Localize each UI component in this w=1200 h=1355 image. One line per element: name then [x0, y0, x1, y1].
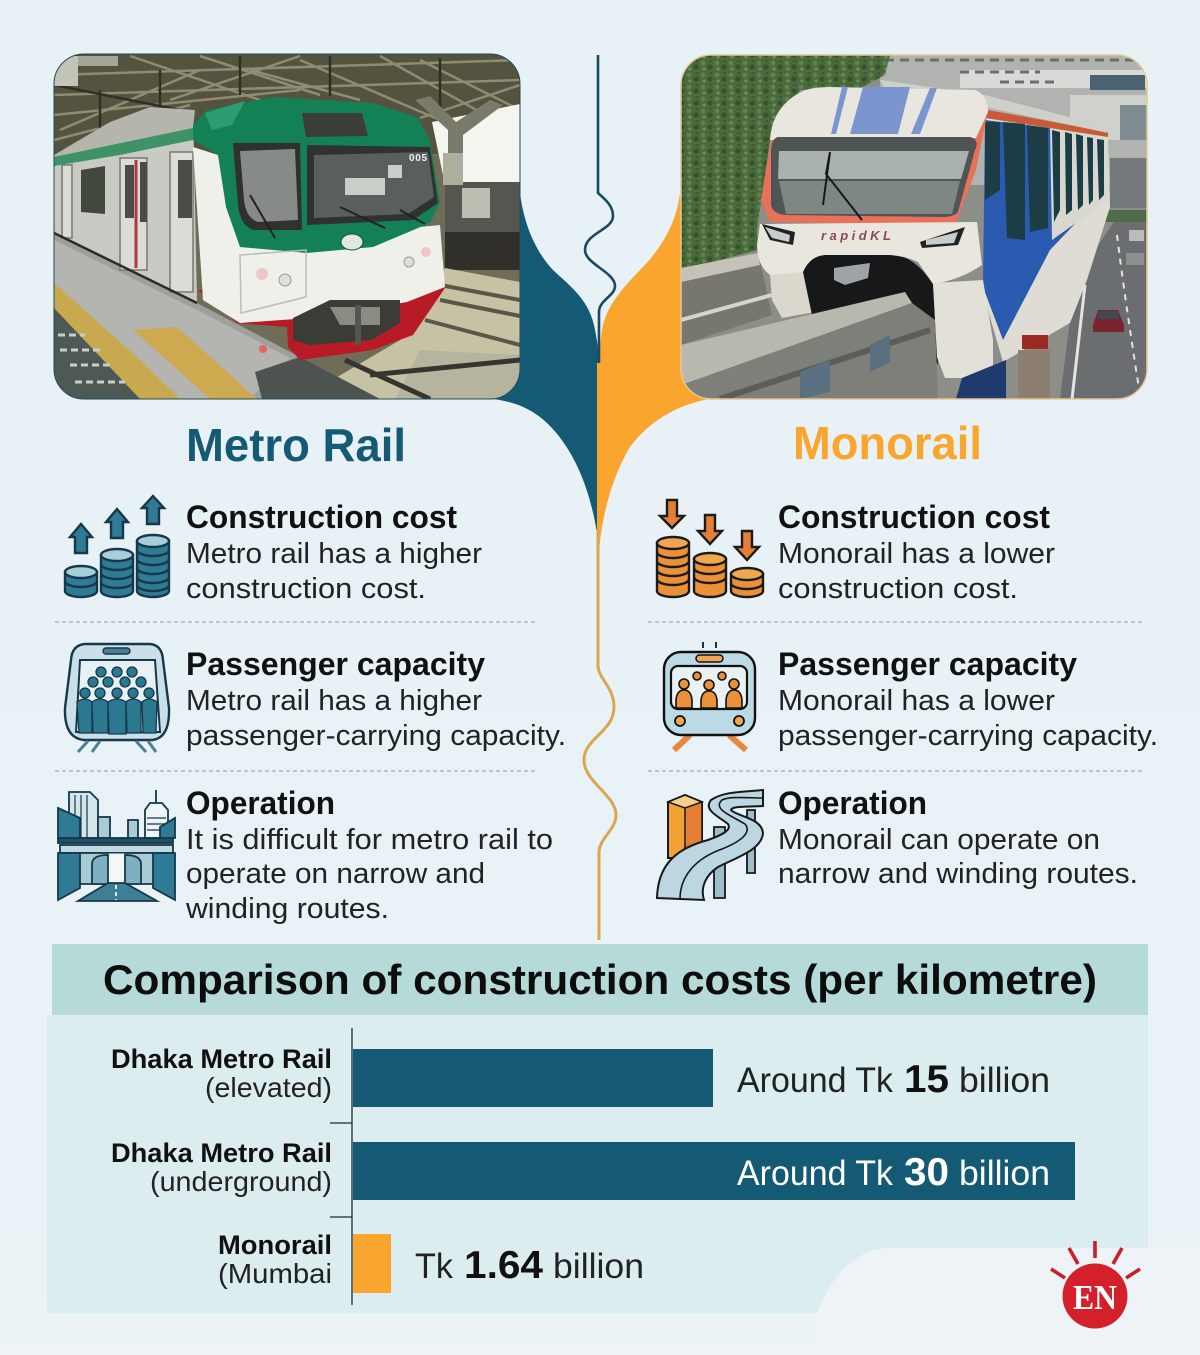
photo: monorail train: rapidKL [821, 228, 891, 243]
text: metro operation: Operation [186, 785, 335, 821]
text: metro construction cost: construction cost. [186, 573, 426, 605]
photo: metro rail train at station [54, 54, 520, 399]
row: Monorail Mumbai: Monorail [218, 1230, 332, 1260]
row: Monorail Mumbai: billion [553, 1247, 644, 1286]
text: metro passenger capacity: passenger-carrying capacity. [186, 720, 566, 752]
row: Dhaka Metro Rail elevated: Around Tk [737, 1061, 893, 1100]
coupler [293, 300, 400, 345]
train side [54, 110, 197, 303]
trees [681, 55, 890, 270]
text: monorail construction cost: construction cost. [778, 573, 1018, 605]
row: Dhaka Metro Rail elevated: billion [959, 1061, 1050, 1100]
icon: small monorail train [664, 642, 755, 750]
icon: coins rising (metro) [65, 496, 169, 597]
central orange swoosh [597, 193, 715, 550]
windscreen [771, 137, 977, 217]
text: monorail passenger capacity [778, 646, 1158, 752]
road [1060, 220, 1147, 399]
heading: Monorail: Monorail [793, 417, 982, 469]
logo: EN sun: EN [1073, 1278, 1117, 1317]
text: metro passenger capacity: Passenger capacity [186, 646, 485, 682]
icon: winding elevated road [657, 790, 763, 900]
logo: EN sun [1051, 1241, 1140, 1328]
row: Dhaka Metro Rail underground [111, 1138, 1075, 1200]
panel: cost comparison chart [47, 944, 1200, 1355]
text: monorail operation: Operation [778, 785, 927, 821]
central teal wavy line [585, 55, 615, 363]
row: Dhaka Metro Rail elevated: Dhaka Metro Rail [111, 1044, 332, 1074]
buildings [880, 55, 1147, 185]
text: monorail construction cost: Monorail has a lower [778, 538, 1055, 570]
row: Monorail Mumbai: 1.64 [464, 1244, 543, 1287]
text: monorail operation [778, 785, 1138, 890]
row: Dhaka Metro Rail underground: (underground) [150, 1166, 332, 1197]
train green cap [193, 97, 440, 253]
head sign [302, 113, 368, 137]
text: monorail passenger capacity: Passenger capacity [778, 646, 1077, 682]
row: Dhaka Metro Rail underground: billion [959, 1154, 1050, 1193]
photo: metro rail train at station: 005 [409, 153, 427, 164]
text: metro operation [185, 785, 553, 925]
train red skirt [198, 288, 445, 360]
text: monorail passenger capacity: passenger-carrying capacity. [778, 720, 1158, 752]
text: metro passenger capacity [186, 646, 566, 752]
row: Monorail Mumbai: Tk [415, 1247, 453, 1286]
chart heading band: Comparison of construction costs (per kilometre) [103, 956, 1097, 1003]
row: Dhaka Metro Rail underground: 30 [904, 1151, 949, 1194]
main guideway [681, 303, 938, 399]
text: metro construction cost: Metro rail has a higher [186, 538, 482, 570]
text: metro construction cost: Construction cost [186, 499, 457, 535]
text: metro operation: winding routes. [185, 893, 389, 925]
text: metro operation: operate on narrow and [186, 858, 485, 890]
text: monorail construction cost [778, 499, 1055, 605]
blue advertising board [956, 360, 1006, 399]
icon: crowded metro train [65, 644, 169, 752]
concrete pier [1018, 350, 1050, 399]
train white front [193, 147, 445, 323]
icon: coins falling (monorail) [657, 500, 763, 597]
tracks [338, 268, 520, 398]
right leg [933, 280, 993, 378]
windows [233, 143, 302, 230]
chart heading band [52, 944, 1148, 1015]
text: metro operation: It is difficult for metro rail to [186, 824, 553, 856]
text: monorail construction cost: Construction cost [778, 499, 1050, 535]
body top with stripes [770, 87, 988, 140]
photo: monorail train [681, 55, 1147, 399]
background guideway [681, 253, 772, 345]
central teal swoosh [480, 193, 599, 533]
central orange wavy line [584, 530, 616, 940]
roof trusses [54, 54, 520, 154]
row: Dhaka Metro Rail underground: Dhaka Metro Rail [111, 1138, 332, 1168]
row: Dhaka Metro Rail underground: Around Tk [737, 1154, 893, 1193]
orange windscreen surround [761, 115, 987, 225]
text: monorail passenger capacity: Monorail has a lower [778, 685, 1055, 717]
sky and background structure [432, 104, 520, 185]
icon: city with flyover [58, 790, 175, 901]
platform [54, 233, 380, 399]
monorail side [985, 110, 1110, 362]
heading: Metro Rail: Metro Rail [186, 419, 406, 471]
row: Dhaka Metro Rail elevated [111, 1044, 1050, 1107]
opening [803, 255, 938, 365]
photo borders [54, 54, 1147, 399]
row: Dhaka Metro Rail elevated: (elevated) [205, 1072, 332, 1103]
text: metro passenger capacity: Metro rail has a higher [186, 685, 482, 717]
text: metro construction cost [186, 499, 482, 605]
face [757, 222, 982, 284]
row: Monorail Mumbai: (Mumbai [218, 1258, 332, 1289]
row: Dhaka Metro Rail elevated: 15 [904, 1058, 949, 1101]
row: Monorail Mumbai [218, 1230, 644, 1293]
train logo and panels [341, 234, 363, 250]
text: monorail operation: Monorail can operate on [778, 824, 1100, 856]
text: monorail operation: narrow and winding routes. [778, 858, 1138, 890]
left leg [770, 270, 815, 318]
